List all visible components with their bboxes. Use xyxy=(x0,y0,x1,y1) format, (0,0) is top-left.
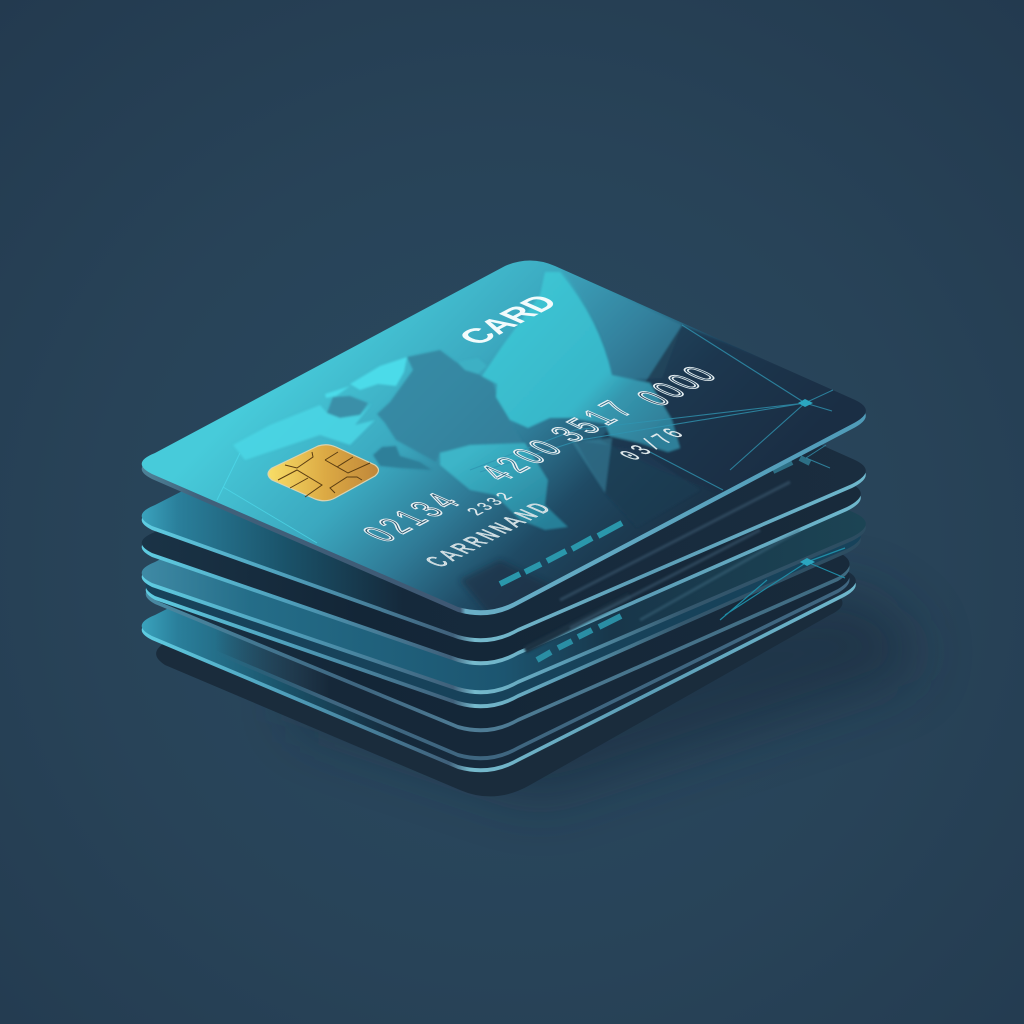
hidden-card details seen between layers xyxy=(525,445,845,660)
dashed security strip xyxy=(500,523,622,584)
front card: edge xyxy=(142,266,866,615)
card 4 xyxy=(142,376,866,694)
expiry date: 03/76 xyxy=(614,424,695,464)
card 7 xyxy=(215,436,850,760)
front card: network node xyxy=(798,399,813,407)
cardholder name: CARRNNAND xyxy=(420,499,563,572)
front card xyxy=(142,260,890,616)
front card: left network lines xyxy=(217,453,317,543)
front card: face xyxy=(142,260,866,610)
small code: 2332 xyxy=(463,490,522,519)
card 2 xyxy=(142,320,866,642)
card 6 xyxy=(146,416,850,732)
card 3 xyxy=(142,346,861,665)
card number group 1: 02134 xyxy=(354,487,474,547)
card number group 3: 3517 xyxy=(542,394,648,447)
card 5 xyxy=(146,388,861,708)
front card: network lines xyxy=(470,325,833,490)
chip xyxy=(268,445,378,501)
soft cast shadow xyxy=(300,590,917,800)
contact shadow xyxy=(156,470,843,796)
brand label: CARD xyxy=(450,291,567,349)
card number group 2: 4200 xyxy=(471,433,577,486)
front card: world map and light wedges xyxy=(233,268,890,616)
card number group 4: 0000 xyxy=(628,360,730,411)
card 8 xyxy=(142,432,856,772)
